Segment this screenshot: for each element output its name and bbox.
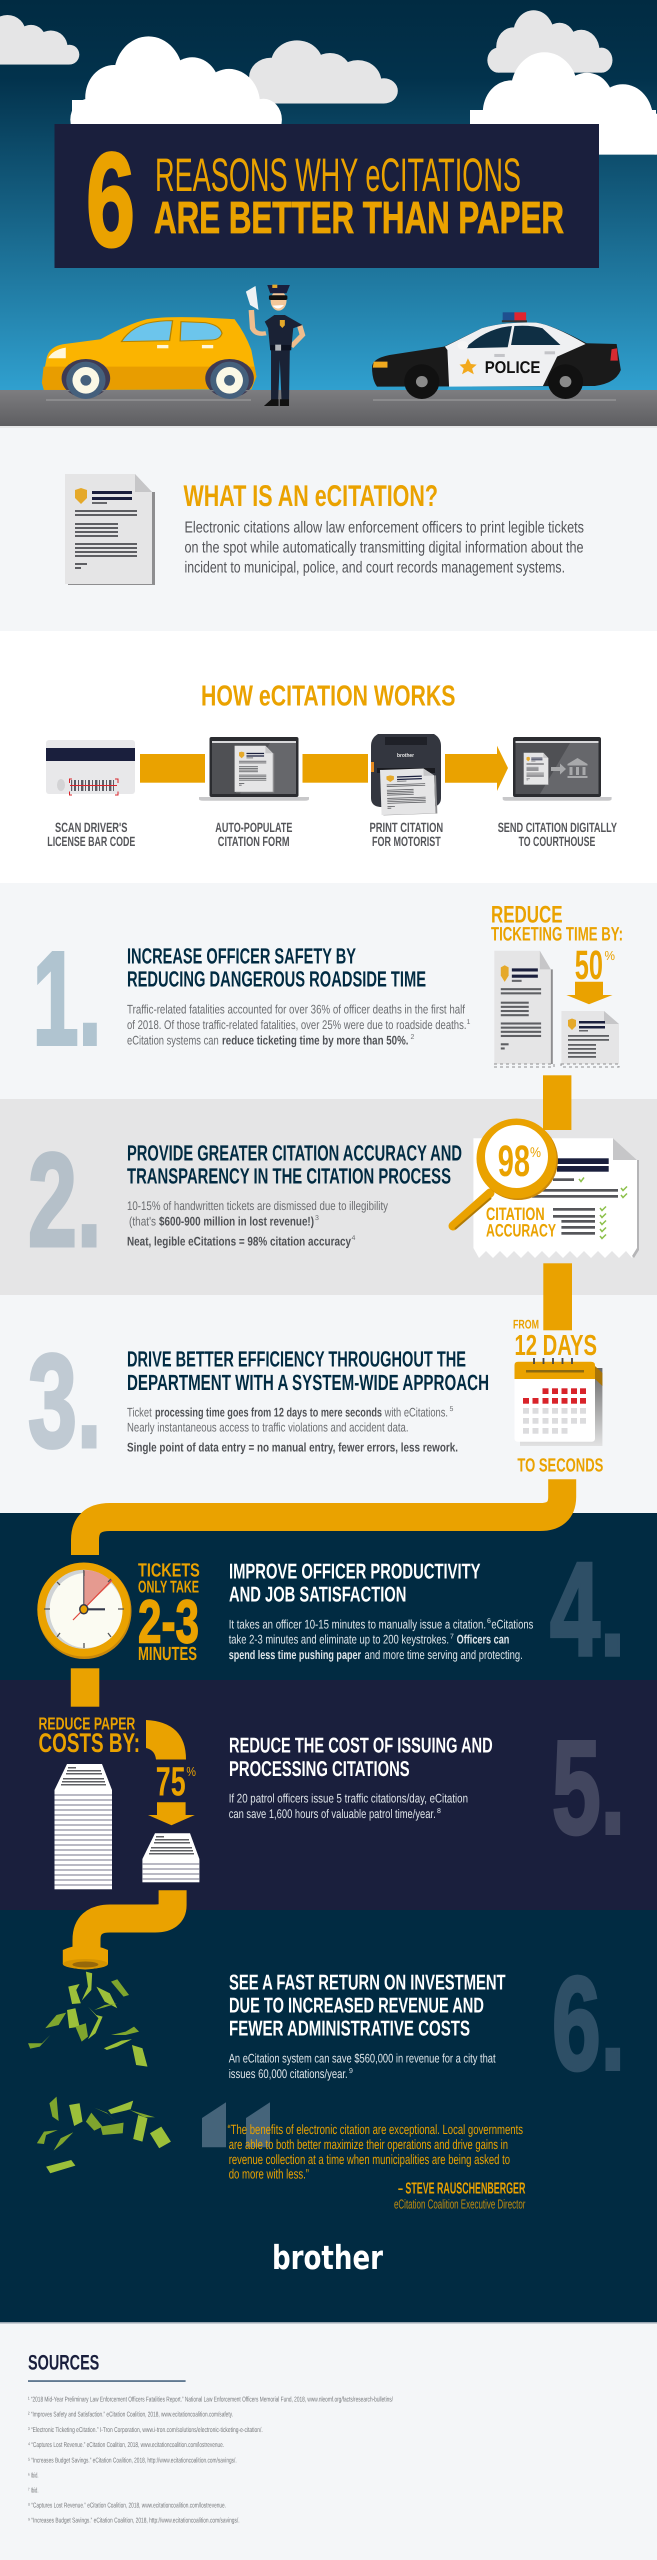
icon: laptop sending to courthouse [503, 737, 612, 801]
step label: print: PRINT CITATION [370, 820, 443, 835]
quote attribution: – STEVE RAUSCHENBERGER [398, 2180, 526, 2197]
icon: yellow car [42, 317, 256, 399]
step label: auto-populate: AUTO-POPULATE [215, 820, 292, 835]
accuracy figure: 98 [498, 1137, 530, 1186]
body: reason 4 [229, 1617, 533, 1662]
accuracy label: CITATION [486, 1204, 545, 1224]
body: reason 3: 5 [450, 1406, 454, 1413]
accuracy figure: % [530, 1144, 541, 1160]
panel: header scene [0, 0, 657, 428]
body: reason 1: 2 [410, 1034, 414, 1041]
body: reason 1: Traffic-related fatalities accounted for over 36% of officer deaths in the first half [127, 1002, 465, 1016]
step label: scan: SCAN DRIVER'S [55, 820, 127, 835]
body: reason 3 [127, 1406, 458, 1455]
heading: reason 5: PROCESSING CITATIONS [229, 1757, 410, 1781]
body: reason 2: 3 [315, 1215, 319, 1222]
callout: tickets only take 2-3 minutes: 2-3 [138, 1588, 199, 1656]
panel: how eCitation works [0, 631, 657, 883]
heading: reason 2: PROVIDE GREATER CITATION ACCURACY AND [127, 1140, 462, 1165]
step label: scan [47, 820, 135, 849]
icon: tall paper stack [54, 1764, 112, 1889]
body: reason 4: spend less time pushing paper [229, 1648, 361, 1662]
callout: reduce ticketing time: REDUCE [491, 901, 563, 928]
connector pipe: clock to reason 5 [71, 1668, 99, 1707]
body: reason 2: 4 [352, 1235, 356, 1242]
step label: scan: LICENSE BAR CODE [47, 834, 135, 849]
body: reason 2: Neat, legible eCitations = 98% citation accuracy [127, 1234, 351, 1248]
quote [228, 2122, 523, 2181]
icon: short eCitation ticket [561, 1011, 619, 1067]
numeral 1: 1. [33, 925, 101, 1073]
heading: reason 1: INCREASE OFFICER SAFETY BY [127, 943, 356, 968]
title numeral: 6 [86, 126, 135, 275]
heading: reason 1: REDUCING DANGEROUS ROADSIDE TIME [127, 967, 426, 992]
icon: citation document [65, 474, 155, 585]
source list: ⁵ “Increases Budget Savings.” eCitation Coalition, 2018, http://www.ecitationcoalition.com/savings/. [28, 2456, 237, 2464]
quote: do more with less.” [229, 2166, 309, 2181]
body: reason 6: 9 [349, 2068, 353, 2075]
body: reason 3: processing time goes from 12 days to mere seconds [155, 1406, 382, 1420]
step label: auto-populate [215, 820, 292, 849]
icon: quotation mark [202, 2102, 270, 2147]
callout: from 12 days: FROM [513, 1317, 539, 1331]
quote: “The benefits of electronic citation are exceptional. Local governments [228, 2122, 523, 2137]
body: reason 4: 7 [450, 1634, 454, 1640]
source list: ⁴ “Captures Lost Revenue.” eCitation Coalition, 2018, www.ecitationcoalition.com/lostrevenue. [28, 2441, 224, 2449]
body: reason 4: eCitations [491, 1617, 533, 1631]
heading: reason 1 [127, 943, 426, 992]
body: reason 4: take 2-3 minutes and eliminate up to 200 keystrokes. [229, 1633, 449, 1647]
arrow: down [148, 1802, 195, 1825]
source list: ⁶ Ibid. [28, 2471, 39, 2479]
callout: from 12 days: 12 DAYS [514, 1330, 597, 1362]
step label: print: FOR MOTORIST [372, 834, 441, 849]
source list [28, 2396, 393, 2524]
step label: auto-populate: CITATION FORM [218, 834, 290, 849]
callout: to seconds: TO SECONDS [517, 1456, 603, 1477]
body: reason 1 [127, 1002, 470, 1047]
connector pipe: reason 3 to clock [85, 1479, 562, 1555]
heading: reason 5 [229, 1734, 493, 1781]
body: reason 4: It takes an officer 10-15 minutes to manually issue a citation. [229, 1617, 486, 1631]
body: reason 4: and more time serving and protecting. [364, 1648, 523, 1662]
logo: brother: brother [272, 2238, 384, 2277]
icon: long paper ticket [494, 951, 554, 1067]
body: reason 4: 6 [487, 1618, 491, 1625]
icon: clock [37, 1562, 132, 1659]
cloud: centre grey [238, 40, 398, 104]
body: reason 6: An eCitation system can save $560,000 in revenue for a city that [229, 2052, 496, 2066]
description text [184, 520, 584, 576]
callout: reduce paper costs: REDUCE PAPER [38, 1713, 136, 1733]
icon: mobile printer [371, 734, 441, 815]
body: reason 5 [229, 1792, 468, 1821]
panel: reason 5 [0, 1680, 657, 1910]
cloud: large white left [70, 36, 282, 140]
heading: reason 4 [229, 1559, 480, 1607]
icon: faucet [63, 1945, 108, 1970]
body: reason 1: eCitation systems can [127, 1033, 219, 1047]
panel: reason 4 [0, 1513, 657, 1684]
heading: reason 6 [229, 1970, 506, 2041]
connector pipe: to faucet [86, 1890, 173, 1950]
heading: what is an eCitation: WHAT IS AN eCITATION? [184, 480, 438, 513]
heading: reason 4: IMPROVE OFFICER PRODUCTIVITY [229, 1559, 480, 1583]
body: reason 1: of 2018. Of those traffic-related fatalities, over 25% were due to roadside deaths. [127, 1018, 466, 1032]
icon: laptop with citation form [199, 737, 309, 801]
icon: police officer [246, 285, 302, 406]
panel: reason 1 [0, 883, 657, 1099]
heading: reason 5: REDUCE THE COST OF ISSUING AND [229, 1734, 493, 1758]
callout: reduce paper costs [38, 1713, 196, 1804]
icon: calendar [514, 1358, 602, 1446]
source list: ³ “Electronic Ticketing eCitation.” I-Tron Corporation, www.i-tron.com/solutions/electronic-ticketing-e-citation/. [28, 2426, 263, 2434]
road [0, 390, 657, 428]
heading: reason 3 [127, 1347, 489, 1395]
callout: from 12 days [513, 1317, 597, 1362]
source list: ⁸ “Captures Lost Revenue.” eCitation Coalition, 2018, www.ecitationcoalition.com/lostrevenue. [28, 2501, 226, 2509]
heading: how eCitation works: HOW eCITATION WORKS [201, 681, 455, 713]
body: reason 5: If 20 patrol officers issue 5 traffic citations/day, eCitation [229, 1792, 468, 1806]
numeral 3: 3. [28, 1328, 101, 1476]
heading: reason 3: DRIVE BETTER EFFICIENCY THROUGHOUT THE [127, 1347, 466, 1372]
quote attribution: eCitation Coalition Executive Director [394, 2196, 526, 2211]
body: reason 4: Officers can [457, 1633, 509, 1647]
step label: send: TO COURTHOUSE [519, 834, 595, 849]
heading: reason 2 [127, 1140, 462, 1188]
panel: reason 6 [0, 1910, 657, 2322]
connector pipe: reason 1 to 2 [543, 1075, 571, 1130]
heading: sources: SOURCES [28, 2351, 99, 2374]
callout: reduce ticketing time [491, 901, 623, 988]
quote: revenue collection at a time when municipalities are being asked to [229, 2152, 510, 2167]
arrow: process flow [140, 746, 508, 791]
body: reason 6: issues 60,000 citations/year. [229, 2067, 348, 2081]
step label: print [370, 820, 443, 849]
quote: are able to both better maximize their operations and drive gains in [229, 2137, 508, 2152]
numeral 2: 2. [28, 1127, 101, 1275]
police car lettering: POLICE [485, 358, 540, 377]
callout: reduce paper costs: COSTS BY: [38, 1728, 140, 1758]
body: reason 3: Nearly instantaneous access to traffic violations and accident data. [127, 1421, 408, 1435]
accuracy label: ACCURACY [486, 1221, 556, 1241]
panel: reason 2 [0, 1099, 657, 1295]
icon: police car [372, 312, 621, 399]
heading: reason 6: FEWER ADMINISTRATIVE COSTS [229, 2017, 470, 2041]
arrow: down [566, 982, 612, 1004]
body: reason 2: (that's [129, 1215, 156, 1229]
body: reason 6 [229, 2052, 496, 2081]
body: reason 2 [127, 1199, 389, 1248]
heading: reason 6: SEE A FAST RETURN ON INVESTMENT [229, 1970, 506, 1994]
heading: reason 6: DUE TO INCREASED REVENUE AND [229, 1993, 484, 2017]
callout: reduce paper costs: % [186, 1764, 196, 1779]
body: reason 5: 8 [437, 1808, 441, 1815]
cloud: top right grey [487, 10, 612, 73]
source list: ¹ “2018 Mid-Year Preliminary Law Enforcement Officers Fatalities Report.” National Law Enforcement Officers Memorial Fund, 2018, www.nleomf.org/facts/research-bulletins/ [28, 2396, 393, 2404]
title banner [54, 124, 599, 275]
source list: ⁹ “Increases Budget Savings.” eCitation Coalition, 2018, http://www.ecitationcoalition.com/savings/. [28, 2516, 240, 2524]
body: reason 3: Ticket [127, 1406, 152, 1420]
body: reason 3: with eCitations. [384, 1406, 448, 1420]
body: reason 2: $600-900 million in lost revenue!) [159, 1215, 314, 1229]
icon: citation with magnifier [453, 1118, 639, 1258]
body: reason 1: reduce ticketing time by more than 50%. [222, 1033, 408, 1047]
source list: ⁷ Ibid. [28, 2486, 39, 2494]
body: reason 1: 1 [466, 1019, 470, 1026]
body: reason 3: Single point of data entry = no manual entry, fewer errors, less rework. [127, 1441, 458, 1455]
icon: short paper stack [142, 1833, 199, 1882]
body: reason 5: can save 1,600 hours of valuable patrol time/year. [229, 1807, 436, 1821]
connector pipe: paper cost curve [146, 1720, 186, 1760]
callout: tickets only take 2-3 minutes [138, 1561, 200, 1665]
step label: send [498, 820, 617, 849]
panel: what is an eCitation [0, 428, 657, 631]
icon: license card with bar code [46, 740, 135, 795]
callout: tickets only take 2-3 minutes: ONLY TAKE [138, 1577, 199, 1596]
cloud: large white right [468, 52, 657, 155]
heading: reason 4: AND JOB SATISFACTION [229, 1583, 406, 1607]
heading: reason 3: DEPARTMENT WITH A SYSTEM-WIDE APPROACH [127, 1370, 489, 1395]
callout: tickets only take 2-3 minutes: MINUTES [138, 1644, 197, 1665]
icon: mobile printer: brother [397, 753, 415, 759]
quote attribution [394, 2180, 526, 2211]
callout: reduce ticketing time: % [604, 948, 615, 963]
callout: reduce paper costs: 75 [156, 1758, 186, 1804]
accuracy label [486, 1204, 556, 1241]
cloud: top left grey [0, 15, 79, 65]
body: reason 2: 10-15% of handwritten tickets are dismissed due to illegibility [127, 1199, 389, 1213]
source list: ² “Improves Safety and Satisfaction.” eCitation Coalition, 2018, www.ecitationcoalition.com/safety. [28, 2411, 233, 2419]
panel: reason 3 [0, 1295, 657, 1513]
callout: reduce ticketing time: 50 [575, 942, 603, 988]
panel: sources [0, 2322, 657, 2560]
heading: reason 2: TRANSPARENCY IN THE CITATION PROCESS [127, 1163, 451, 1188]
connector pipe: reason 2 to 3 [543, 1263, 572, 1330]
callout: tickets only take 2-3 minutes: TICKETS [138, 1561, 200, 1582]
icon: falling money [28, 1972, 171, 2173]
